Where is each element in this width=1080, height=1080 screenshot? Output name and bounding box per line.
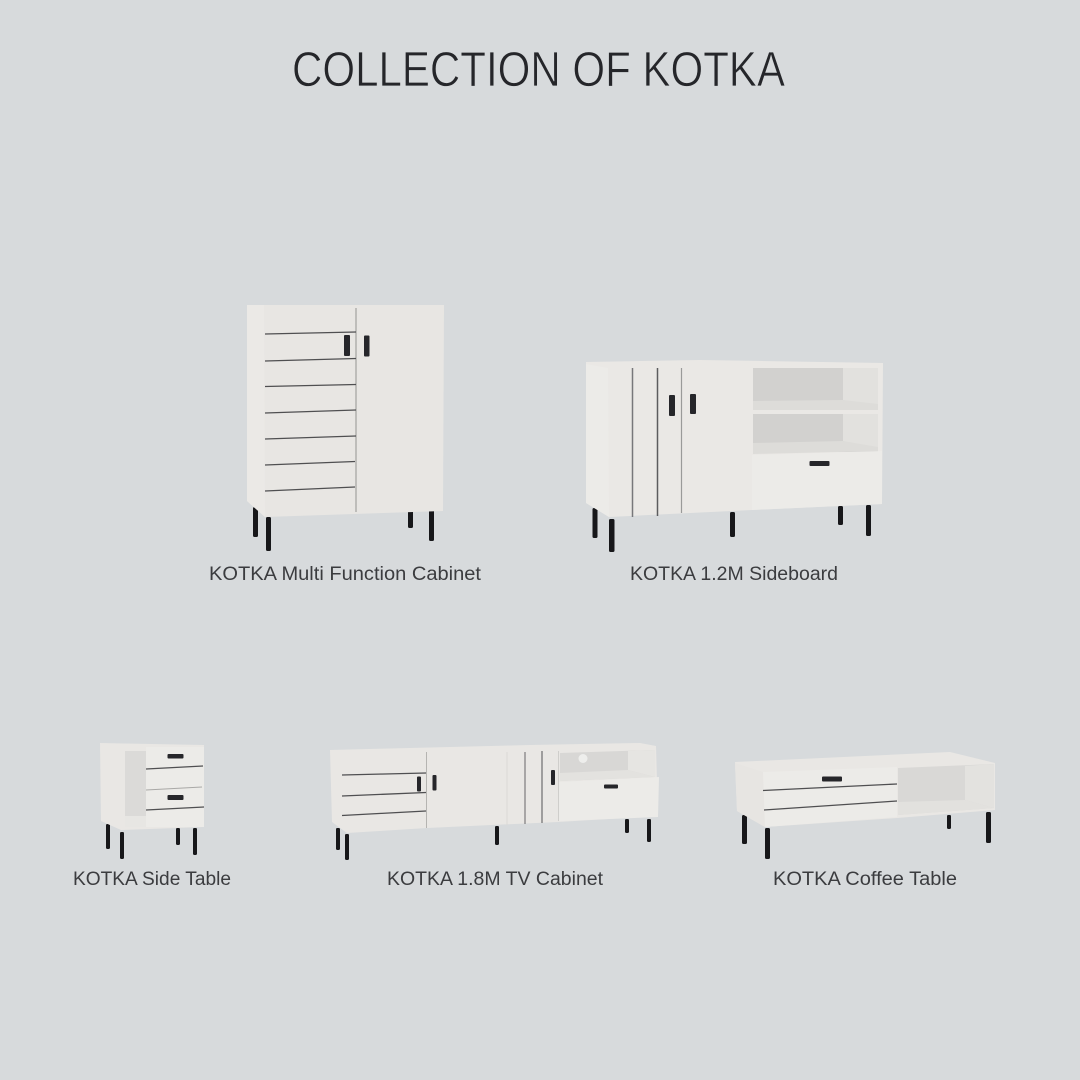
tv cabinet cable hole	[578, 754, 588, 763]
side table drawers	[146, 747, 204, 827]
coffee table label: KOTKA Coffee Table	[773, 869, 957, 890]
sideboard door lines	[632, 368, 682, 517]
sideboard upper shelf	[753, 368, 878, 410]
cabinet side panel	[247, 305, 265, 517]
tv cabinet legs	[336, 819, 651, 860]
side table open compartment	[125, 751, 146, 827]
coffee table legs	[742, 812, 991, 859]
side table body	[100, 743, 204, 830]
side table drawer lines	[146, 766, 204, 810]
cabinet body	[247, 305, 444, 517]
title: COLLECTION OF KOTKA	[292, 43, 785, 97]
panel: tv cabinet	[330, 743, 659, 890]
panel: side table	[73, 743, 231, 890]
coffee table handle	[822, 776, 842, 782]
coffee table drawers	[763, 767, 897, 827]
sideboard body	[586, 360, 883, 517]
sideboard side panel	[586, 364, 609, 517]
sideboard legs	[592, 505, 871, 552]
side table handles	[168, 754, 184, 800]
cabinet label: KOTKA Multi Function Cabinet	[209, 564, 482, 585]
tv cabinet drawer	[559, 777, 659, 821]
cabinet drawer lines	[265, 332, 356, 491]
side table legs	[106, 824, 197, 859]
tv cabinet drawer lines	[342, 773, 426, 816]
tv cabinet body	[330, 743, 658, 833]
tv cabinet handles	[417, 770, 618, 792]
sideboard handles	[669, 394, 830, 466]
sideboard label: KOTKA 1.2M Sideboard	[630, 564, 838, 585]
panel: coffee table	[735, 752, 995, 890]
sideboard lower shelf	[753, 414, 878, 454]
tv cabinet door lines	[426, 751, 558, 828]
cabinet legs	[253, 507, 434, 551]
tv cabinet label: KOTKA 1.8M TV Cabinet	[387, 869, 604, 890]
cabinet door line	[355, 308, 357, 512]
sideboard drawer	[752, 451, 882, 510]
cabinet handles	[344, 335, 370, 356]
side table label: KOTKA Side Table	[73, 869, 231, 890]
panel: multi function cabinet	[209, 305, 482, 585]
coffee table drawer lines	[763, 784, 897, 810]
coffee table body	[735, 752, 995, 827]
tv cabinet open compartment	[560, 750, 655, 781]
coffee table open compartment	[898, 764, 994, 815]
coffee table side panel	[735, 763, 765, 827]
panel: sideboard	[586, 360, 883, 585]
